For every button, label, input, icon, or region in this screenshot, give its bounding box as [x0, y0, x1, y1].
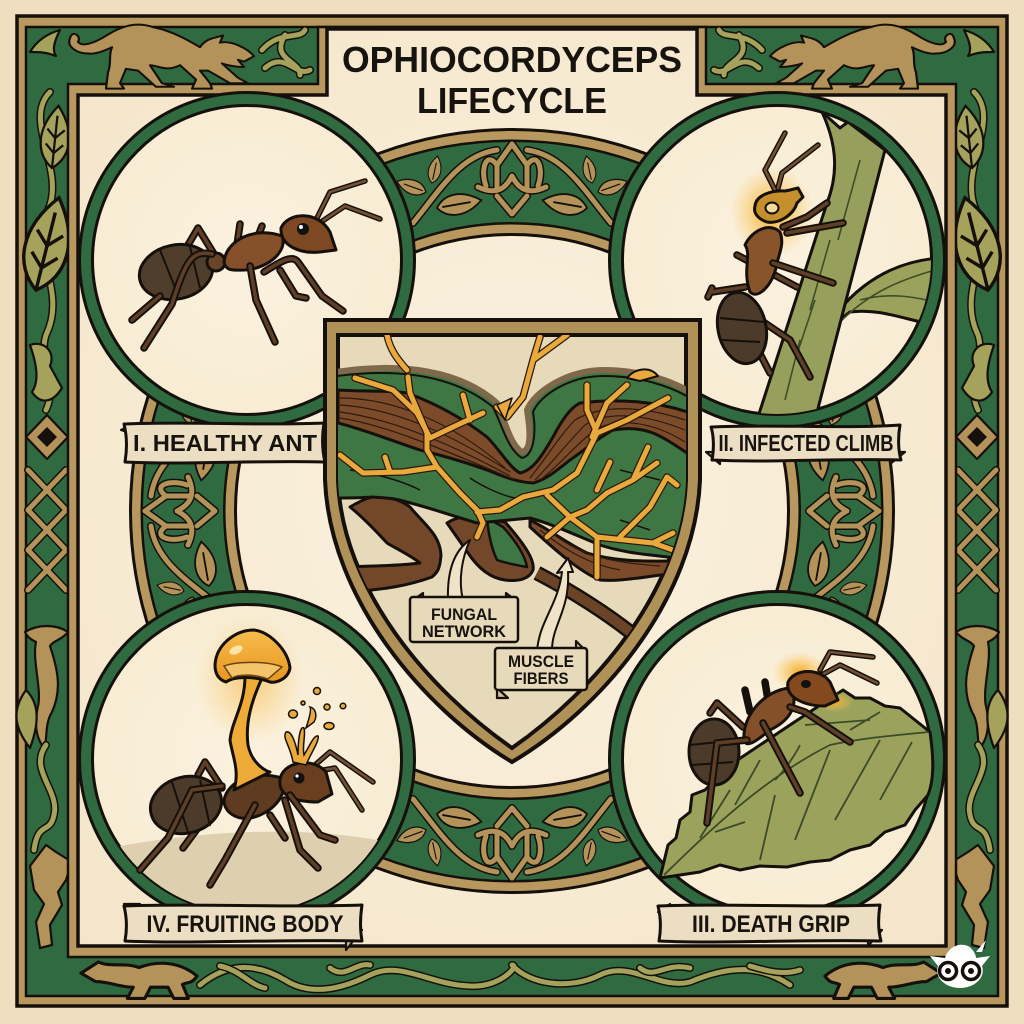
left limb: [345, 496, 441, 592]
tail tendon: [537, 573, 640, 640]
mushroom: [215, 630, 290, 790]
bottom border band: [200, 965, 800, 989]
green body: [336, 368, 690, 560]
large knotwork ring: [145, 144, 879, 878]
beast: bottom left: [81, 962, 197, 998]
outer skin: [336, 368, 690, 452]
leaf: [660, 690, 933, 878]
callout: fungal network: NETWORK: [422, 622, 507, 641]
panel: I healthy ant: [86, 99, 408, 463]
ant: death grip: [689, 652, 877, 823]
inner tan frame with title notch: [68, 27, 956, 957]
pointer: fungal network: [448, 540, 470, 600]
label scroll: IV: [124, 904, 362, 950]
shield cross-section: [336, 335, 690, 640]
right border band: [944, 92, 1009, 948]
ring ornament: left: [145, 393, 224, 629]
golden fungal network: [340, 335, 677, 577]
lower right muscle: [530, 520, 690, 580]
callout: muscle fibers: MUSCLE: [508, 652, 574, 671]
label scroll: II: [706, 425, 905, 464]
pointer: muscle fibers: [537, 558, 573, 650]
ant: infected, climbing: [708, 133, 843, 377]
label scroll: I: [121, 423, 328, 463]
label scroll: III: [658, 904, 882, 946]
ant: fruiting body: [140, 615, 373, 885]
ant: healthy: [132, 181, 380, 348]
corner ornament: top right: [714, 30, 994, 75]
panel: IV fruiting body: [86, 598, 408, 950]
title: OPHIOCORDYCEPS: [342, 39, 682, 80]
panel: II infected climb: [616, 99, 940, 464]
label scroll: I: I. HEALTHY ANT: [133, 430, 317, 456]
beast: top left: [69, 25, 254, 89]
central shield: [325, 320, 700, 762]
beast: bottom right: [825, 962, 941, 998]
panel: III death grip: [616, 598, 938, 946]
label scroll: IV: IV. FRUITING BODY: [146, 911, 344, 938]
icon: owl logo: [930, 940, 990, 988]
label scroll: II: II. INFECTED CLIMB: [718, 430, 894, 456]
ground: [120, 832, 378, 904]
title: LIFECYCLE: [417, 80, 607, 121]
label scroll: III: III. DEATH GRIP: [692, 911, 850, 938]
callout: fungal network: [410, 593, 518, 642]
title: [342, 39, 682, 121]
middle limbs: [447, 517, 533, 581]
corner ornament: top left: [30, 30, 310, 75]
ring ornament: right: [800, 393, 879, 629]
callout: muscle fibers: FIBERS: [514, 669, 568, 688]
spores and sprouts: [285, 688, 346, 765]
beast: top right: [770, 25, 955, 89]
plant stem and leaf: [757, 112, 940, 420]
left border band: [15, 92, 80, 948]
ring ornament: bottom: [394, 799, 630, 878]
ring ornament: top: [394, 144, 630, 223]
callout: muscle fibers: [495, 641, 587, 698]
muscle fibers: [338, 390, 690, 483]
green shading: [350, 470, 660, 530]
callout: fungal network: FUNGAL: [431, 605, 497, 624]
